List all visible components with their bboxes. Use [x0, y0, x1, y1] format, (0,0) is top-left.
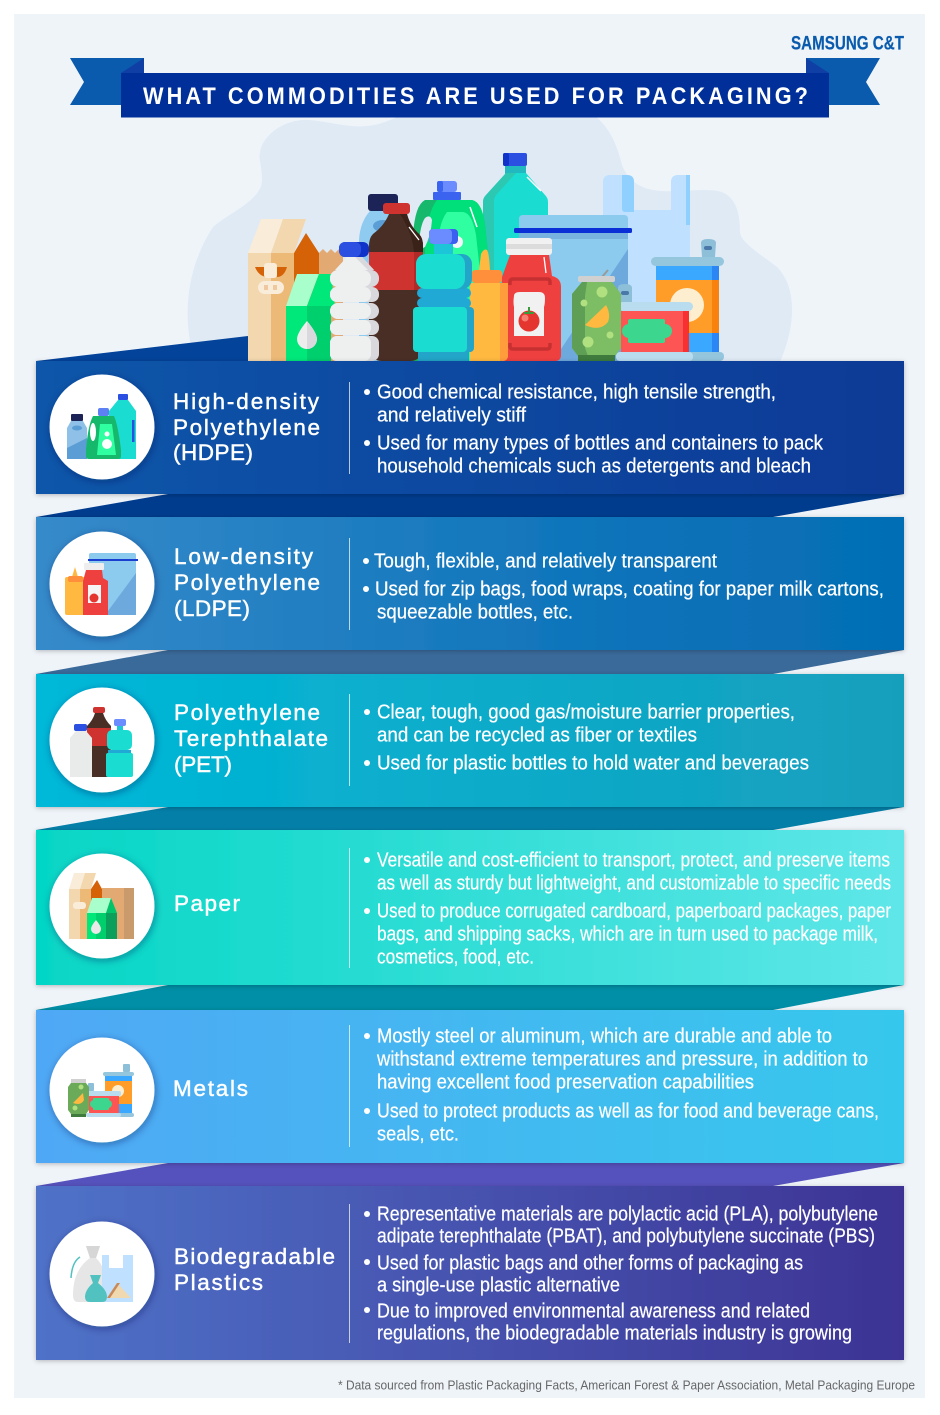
label: HDPE [173, 389, 320, 465]
title: WHAT COMMODITIES ARE USED FOR PACKAGING? [143, 83, 811, 110]
ketchup bottle [502, 238, 561, 361]
text: Biodegradable description: regulations, the biodegradable materials industry is growing [377, 1323, 852, 1345]
label: HDPE: Polyethylene [173, 415, 320, 440]
text: Biodegradable description: adipate terephthalate (PBAT), and polybutylene succinate (PBS) [377, 1226, 875, 1248]
text: Metals description: Used to protect products as well as for food and beverage cans, [377, 1101, 879, 1123]
icon: metal cans [50, 1038, 154, 1142]
connector ribbons between panels [36, 494, 904, 1186]
panel: LDPE [36, 517, 904, 650]
text: Metals description: Mostly steel or aluminum, which are durable and able to [377, 1026, 832, 1048]
label: PET: Terephthalate [174, 726, 328, 751]
text: Metals description: withstand extreme temperatures and pressure, in addition to [376, 1049, 868, 1071]
icon: biodegradable bags [50, 1222, 154, 1326]
text: PET description: Clear, tough, good gas/moisture barrier properties, [377, 702, 795, 724]
text: Metals description [364, 1026, 879, 1146]
label: LDPE: (LDPE) [174, 596, 250, 621]
text: LDPE description: Tough, flexible, and relatively transparent [374, 551, 717, 573]
logo: Samsung C&T: SAMSUNG C&T [791, 34, 904, 54]
light blue jug [359, 194, 410, 361]
background blob [188, 116, 792, 362]
text: Metals description: having excellent food preservation capabilities [377, 1072, 754, 1094]
label: Paper: Paper [174, 891, 240, 916]
text: Paper description: cosmetics, food, etc. [377, 947, 534, 969]
icon: HDPE bottles [50, 374, 154, 480]
icon: LDPE products [50, 532, 154, 636]
tall can [651, 239, 724, 361]
plastic bag [603, 175, 690, 361]
green detergent jug [405, 181, 492, 361]
big teal bottle [483, 153, 548, 361]
text: Biodegradable description: Used for plastic bags and other forms of packaging as [377, 1253, 803, 1275]
text: Paper description [364, 850, 891, 969]
text: Biodegradable description: Representative materials are polylactic acid (PLA), polybutylene [377, 1204, 878, 1226]
text: Metals description: seals, etc. [377, 1124, 459, 1146]
icon: PET bottles [50, 688, 154, 792]
white bottle [330, 242, 379, 361]
label: Biodegradable Plastics: Plastics [174, 1270, 263, 1295]
label: Biodegradable Plastics: Biodegradable [174, 1244, 335, 1269]
title banner [70, 58, 880, 118]
text: HDPE description: household chemicals such as detergents and bleach [377, 456, 811, 478]
label: PET [174, 700, 328, 777]
label: Biodegradable Plastics [174, 1244, 335, 1295]
milk carton [248, 219, 319, 361]
top ribbon behind products [36, 336, 330, 361]
text: LDPE description: Used for zip bags, food wraps, coating for paper milk cartons, [375, 579, 884, 601]
label: LDPE: Polyethylene [174, 570, 320, 595]
text: Biodegradable description: Due to improved environmental awareness and related [377, 1301, 810, 1323]
tuna can [616, 284, 693, 361]
panel: HDPE [36, 361, 904, 494]
text: HDPE description: and relatively stiff [377, 405, 526, 427]
label: PET: (PET) [174, 752, 232, 777]
icon: paper products [50, 854, 154, 958]
label: LDPE [174, 544, 320, 621]
water bottle [413, 229, 474, 361]
hero illustration: packaging products [248, 153, 724, 361]
text: HDPE description: Good chemical resistance, high tensile strength, [377, 382, 776, 404]
panel: Metals [36, 1010, 904, 1163]
coke bottle [369, 203, 423, 361]
panel: PET [36, 674, 904, 807]
label: PET: Polyethylene [174, 700, 320, 725]
zip bag [514, 215, 632, 361]
text: PET description: and can be recycled as fiber or textiles [377, 725, 697, 747]
text: HDPE description: Used for many types of bottles and containers to pack [377, 433, 824, 455]
label: Metals: Metals [173, 1076, 248, 1101]
paper bag [319, 249, 343, 361]
text: LDPE description [363, 551, 884, 624]
green carton [286, 274, 335, 361]
text: PET description [364, 702, 809, 775]
text: HDPE description [364, 382, 824, 478]
green soda can [572, 270, 621, 361]
mustard bottle [470, 250, 508, 361]
label: HDPE: (HDPE) [173, 440, 253, 465]
label: HDPE: High-density [173, 389, 320, 414]
text: LDPE description: squeezable bottles, etc. [377, 602, 573, 624]
text: Biodegradable description: a single-use plastic alternative [377, 1275, 620, 1297]
text: Biodegradable description [364, 1204, 878, 1345]
text: PET description: Used for plastic bottles to hold water and beverages [377, 753, 809, 775]
label: LDPE: Low-density [174, 544, 314, 569]
panel: Biodegradable Plastics [36, 1186, 904, 1360]
panel: Paper [36, 830, 904, 985]
